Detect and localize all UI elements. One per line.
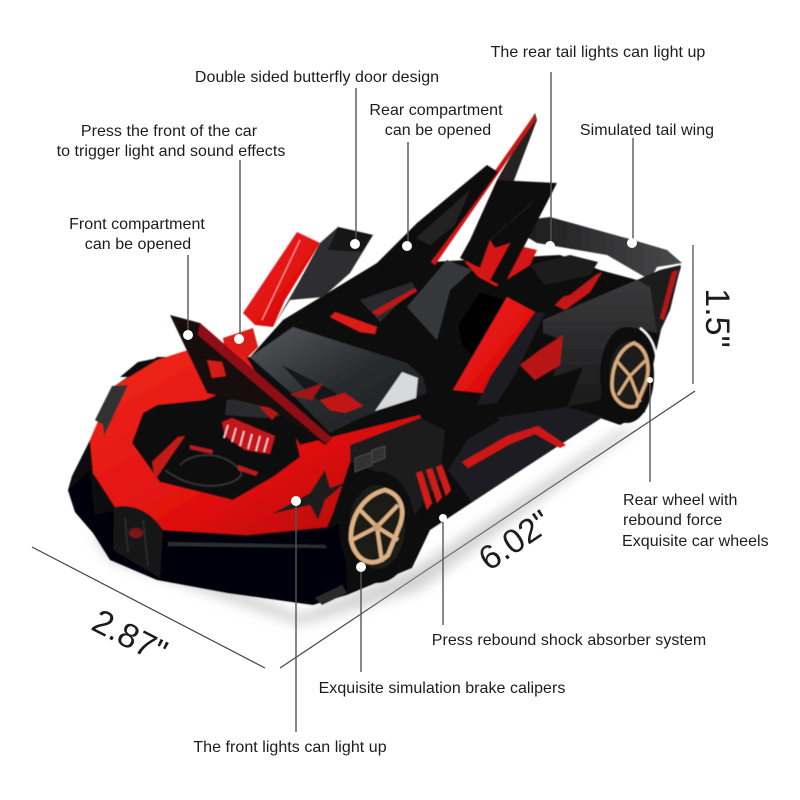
label: front compartment: [69, 216, 205, 253]
engine air filter: [213, 388, 297, 458]
label: rear tail lights: The rear tail lights can light up: [491, 44, 705, 61]
rear tall fin: [497, 113, 537, 183]
rear wing: [503, 217, 682, 280]
windshield: [250, 327, 427, 433]
side vent red stripes: [416, 465, 451, 510]
dimension: width 2.87 inch: 2.87": [86, 602, 173, 672]
engine bay: [132, 385, 300, 500]
main body base: [68, 255, 681, 605]
roof: [283, 263, 452, 363]
car illustration: [68, 113, 682, 625]
label: press front of car: [57, 123, 285, 160]
label: shock absorber: Press rebound shock absorber system: [432, 632, 706, 649]
label: rear compartment: [369, 102, 503, 139]
label: rear wheel: [622, 492, 769, 550]
side intake red: [520, 335, 563, 380]
dimension: length 6.02 inch: 6.02": [472, 503, 558, 578]
door sill dark: [410, 405, 500, 455]
label: rear wheel: Exquisite car wheels: [622, 533, 769, 550]
label: brake calipers: Exquisite simulation brake calipers: [319, 680, 565, 697]
rear haunch matte panel: [543, 280, 657, 407]
label: front compartment: Front compartment: [69, 216, 205, 233]
label: tail wing: Simulated tail wing: [580, 122, 714, 139]
x badge hood: [95, 385, 128, 436]
hood top vent: [120, 357, 163, 377]
callout dots: [183, 238, 653, 572]
rear hatch lattice: [460, 180, 557, 287]
red hood and front: [90, 345, 422, 535]
label: rear wheel: rebound force: [623, 512, 722, 529]
right butterfly door: [407, 260, 545, 407]
leader lines: [188, 72, 650, 732]
rear wheel: [600, 327, 657, 423]
label: rear wheel: Rear wheel with: [623, 492, 737, 509]
opened hood panel: [170, 315, 332, 445]
label: rear compartment: can be opened: [385, 122, 491, 139]
label: rear compartment: Rear compartment: [369, 102, 503, 119]
label: press front of car: Press the front of the car: [81, 123, 258, 140]
side body black stripes: [350, 418, 445, 515]
rear red deck: [465, 237, 537, 290]
roof red stripe: [330, 312, 377, 334]
ground shadow: [90, 425, 640, 625]
label: press front of car: to trigger light and sound effects: [57, 143, 285, 160]
red tab behind hood: [223, 328, 258, 358]
rear hatch left half: [377, 165, 498, 275]
side door matte panel: [448, 407, 603, 502]
grille and front splitter: [68, 470, 347, 605]
side red accent line: [462, 426, 566, 468]
label: butterfly door: Double sided butterfly door design: [195, 69, 439, 86]
label: front compartment: can be opened: [85, 236, 191, 253]
wing end plate: [637, 265, 681, 336]
x badge side: [272, 470, 346, 520]
dimension: width 2.87 inch: [32, 547, 265, 672]
dimension: height 1.5 inch: [693, 245, 736, 384]
dimension: length 6.02 inch: [280, 391, 695, 668]
left butterfly door: [243, 227, 373, 327]
dimension: height 1.5 inch: 1.5": [698, 288, 736, 348]
front wheel: [339, 471, 415, 583]
label: front lights: The front lights can light up: [193, 739, 387, 756]
